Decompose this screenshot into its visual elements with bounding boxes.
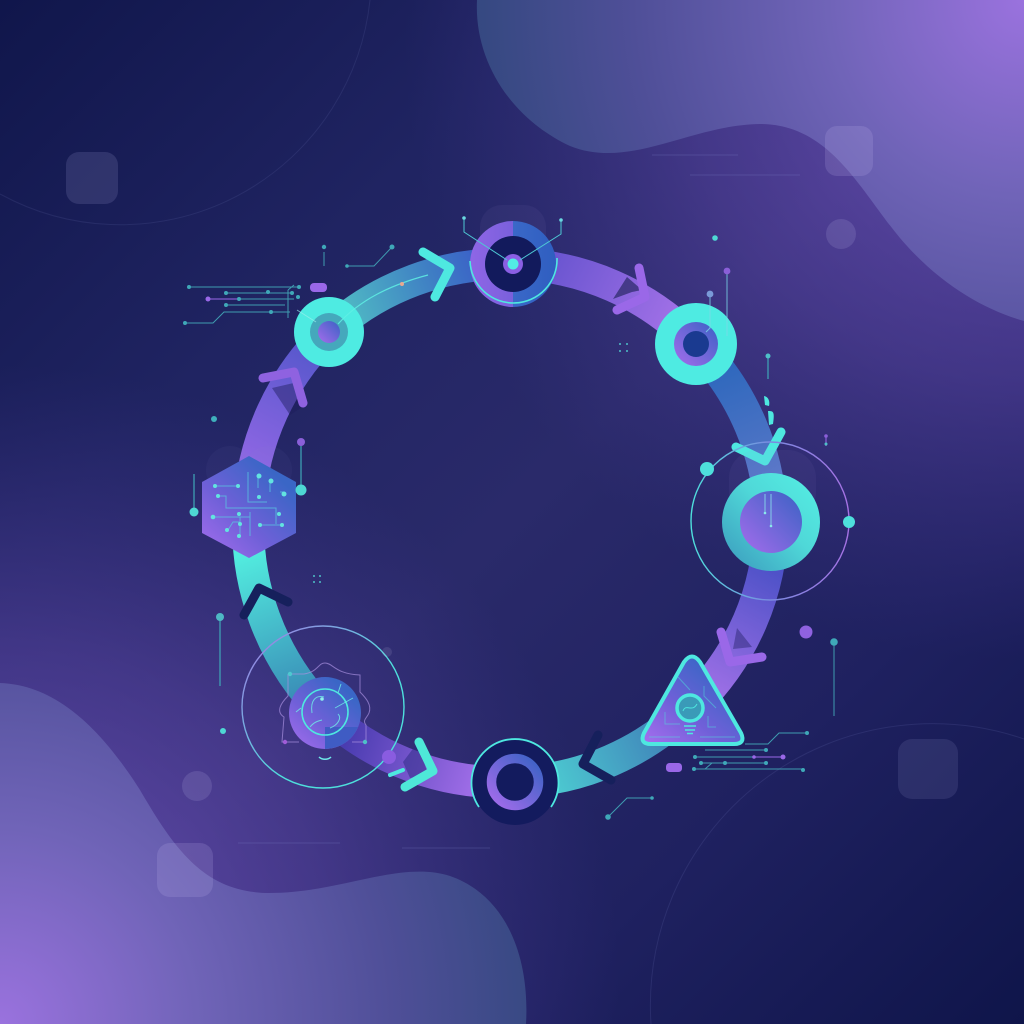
- chevron: lower-left teal: [405, 742, 433, 787]
- chevron: top-right purple: [617, 268, 645, 310]
- ring segment: lower-left node to hexagon: [248, 507, 325, 713]
- ring segment: top node to node 2: [513, 264, 696, 344]
- icon: light bulb: [677, 695, 703, 734]
- chevron: top-left teal: [423, 252, 450, 297]
- chevron: left dark: [244, 588, 288, 615]
- ring segment: triangle to bottom node: [515, 705, 692, 782]
- chevron shadows: [272, 277, 752, 778]
- dot: purple lower right: [800, 626, 812, 638]
- node 2: teal ring: [655, 268, 737, 385]
- ring segment: right node to triangle: [692, 522, 771, 705]
- ring segment: node 2 to right node: [696, 344, 771, 522]
- chevron: bottom dark: [583, 735, 611, 780]
- blob: bottom left: [0, 683, 526, 1024]
- node: bottom dark ring: [472, 739, 558, 825]
- node: hexagon circuit: [202, 446, 296, 558]
- node: right large ring with orbit: [691, 442, 855, 600]
- circuit lines: lower right: [605, 638, 838, 820]
- small dot grids: [313, 343, 628, 583]
- ring segment: bottom node to lower-left node: [325, 713, 515, 782]
- chevron: lower-right purple: [721, 632, 762, 662]
- callout pins: upper right: [712, 235, 828, 446]
- node: lower-left orbit ring: [242, 626, 404, 788]
- callout pins: left of hexagon: [190, 416, 306, 516]
- cycle ring: [248, 264, 771, 782]
- node 1: teal ring: [294, 275, 428, 367]
- blob: top right: [477, 0, 1024, 321]
- pill: lower right: [666, 763, 682, 772]
- node: top split ring: [462, 205, 563, 307]
- callout pins: lower left: [216, 613, 226, 734]
- ring segment: hexagon to node 1: [249, 332, 329, 507]
- ring segment: node 1 to top node: [329, 264, 513, 332]
- chevron: right teal: [736, 432, 781, 461]
- node: triangle with light bulb: [643, 656, 742, 744]
- chevron: upper-left purple: [263, 372, 303, 403]
- circuit lines: upper left: [183, 244, 394, 325]
- chevron arrows: [244, 252, 781, 787]
- pill: upper left: [310, 283, 327, 292]
